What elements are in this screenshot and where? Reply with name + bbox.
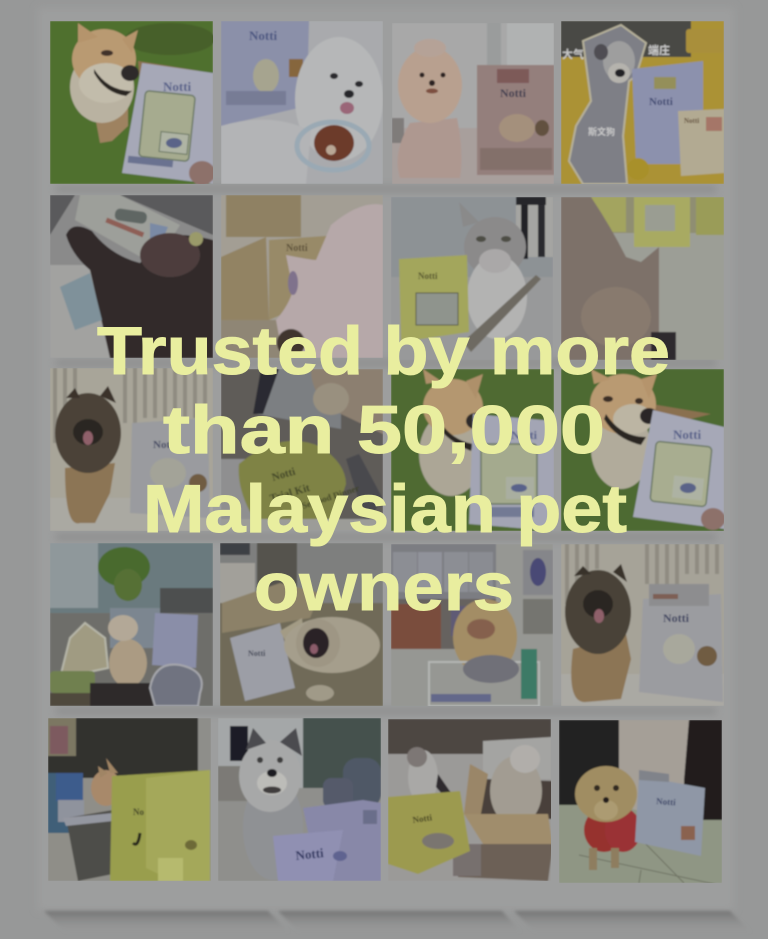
photo: grey fluffy dog with lavender Notti bags [218,718,381,881]
title: headline overlay: Malaysian pet [143,471,627,547]
photo: white cat with cardboard Notti boxes [221,195,383,358]
title: headline overlay: Trusted by more [97,313,670,389]
photo: poodle in red dress with Notti bag [559,720,722,883]
photo: Notti trial kit pouch with cat: Seafood Dinner [301,483,360,511]
photo: Notti trial kit pouch with cat: Trial Kit [269,482,312,505]
photo: white spitz with bear bib and Notti bag [221,21,383,184]
title: headline overlay: than 50,000 [163,392,605,468]
photo: two cats with cardboard box and Notti bag [388,719,551,881]
photo: fluffy dog on floor with Notti bag: Notti [248,649,266,658]
photo: Notti trial kit pouch with cat [221,369,383,520]
photo: shiba holding Notti card on grass [561,369,724,531]
photo: keeshond with Notti bag, radiator background [561,544,724,706]
shelf shadows at page bottom [44,911,752,933]
photo: schnauzer sticker with yellow sofa and bags: 大气 [562,47,584,61]
photo: grey and white cat with yellow Notti box [391,197,553,352]
title: headline overlay [97,313,670,625]
photo: poodle in red dress with Notti bag: Notti [656,796,677,807]
photo: shiba on grass, cropped left [391,369,554,531]
photo: schnauzer sticker with yellow sofa and bags: Notti [684,117,699,125]
photo: pomeranian in shopping cart with shelves [391,544,553,706]
soft shadows under photo rows [56,186,716,714]
photo: schnauzer sticker with yellow sofa and bags [561,21,724,184]
photo: keeshond with Notti bag by radiator: Notti [153,439,177,451]
photo: schnauzer sticker with yellow sofa and bags: Notti [649,96,673,108]
photo: shiba holding Notti card on grass: Notti [673,427,702,442]
photo: ginger cat beside bin and green Notti boxes: No [133,807,144,817]
photo: keeshond with Notti bag, radiator background: Notti [663,611,690,625]
photo: ginger cat beside bin and green Notti boxes [48,718,211,881]
photo: shiba on grass, cropped left: Notti [511,428,538,442]
photo: Notti trial kit pouch with cat: Notti [271,466,297,484]
photo: grey and white cat with yellow Notti box: Notti [418,271,438,281]
photo: white cat with cardboard Notti boxes: Notti [286,243,308,254]
photo: black cat with white box [50,195,213,358]
photo: fluffy dog on floor with Notti bag [220,543,383,706]
photo: poodle at Notti event with plant and signs [50,543,213,706]
photo: shiba with Notti card on grass [50,21,213,184]
photo: white spitz with bear bib and Notti bag: Notti [249,28,278,43]
photo: schnauzer sticker with yellow sofa and bags: 斯文狗 [588,126,615,137]
photo: schnauzer sticker with yellow sofa and bags: 端庄 [648,43,670,57]
title: headline overlay: owners [254,549,514,625]
photo: shiba with Notti card on grass: Notti [163,79,192,94]
photo: keeshond with Notti bag by radiator [50,368,213,531]
photo: taupe cat with yellow boxes behind [561,197,724,360]
photo: peach poodle with Notti bag [392,23,554,184]
photo: grey fluffy dog with lavender Notti bags: Notti [295,845,325,863]
photo: peach poodle with Notti bag: Notti [500,86,527,100]
photo: two cats with cardboard box and Notti bag: Notti [412,812,433,825]
